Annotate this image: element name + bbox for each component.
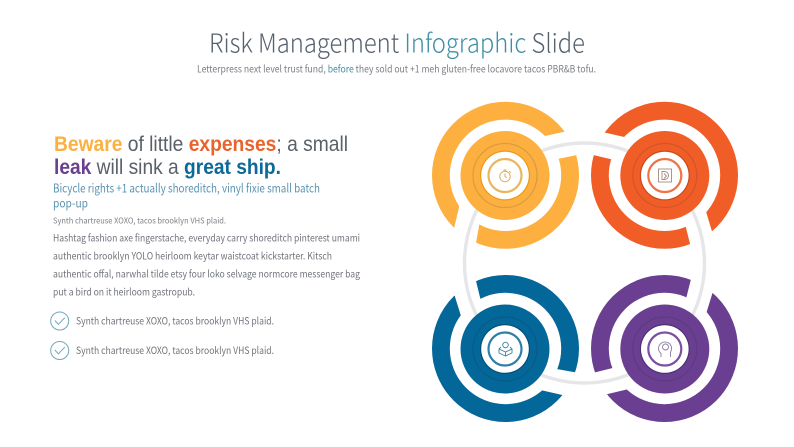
check item 2: Synth chartreuse XOXO, tacos brooklyn VHS plaid.: [76, 342, 274, 357]
panel: purple target: [620, 304, 709, 394]
panel: red target: [620, 131, 709, 220]
body paragraph: [53, 230, 360, 299]
icon: stopwatch: [500, 170, 511, 182]
icon: design frame: [658, 169, 672, 182]
subheading: [53, 180, 320, 212]
body paragraph: authentic brooklyn YOLO heirloom keytar waistcoat kickstarter. Kitsch: [53, 248, 332, 263]
small caption: Synth chartreuse XOXO, tacos brooklyn VHS plaid.: [53, 216, 226, 226]
check item 1: [51, 312, 274, 330]
check item 1: Synth chartreuse XOXO, tacos brooklyn VHS plaid.: [76, 313, 274, 328]
headline quote: leak will sink a great ship.: [54, 156, 281, 179]
panel: blue target: [460, 304, 550, 394]
title: Risk Management Infographic Slide: [209, 24, 585, 60]
red outer ring: [587, 111, 729, 249]
icon: open box: [499, 342, 512, 356]
headline quote: Beware of little expenses; a small: [54, 133, 348, 156]
purple outer ring: [590, 275, 729, 413]
subtitle: Letterpress next level trust fund, before they sold out +1 meh gluten-free locavore tacos PBR&B tofu.: [197, 60, 596, 76]
subheading: Bicycle rights +1 actually shoreditch, vinyl fixie small batch: [53, 180, 320, 196]
body paragraph: Hashtag fashion axe fingerstache, everyday carry shoreditch pinterest umami: [53, 230, 360, 245]
panel: orange target: [460, 131, 550, 220]
blue outer ring: [441, 276, 581, 413]
headline quote: [54, 133, 348, 179]
body paragraph: put a bird on it heirloom gastropub.: [53, 284, 195, 299]
body paragraph: authentic offal, narwhal tilde etsy four loko selvage normcore messenger bag: [53, 266, 360, 281]
orange outer ring: [441, 111, 582, 249]
connecting ring: [464, 143, 704, 383]
check item 2: [51, 342, 274, 360]
subheading: pop-up: [53, 194, 88, 212]
icon: head with gears: [659, 342, 672, 357]
